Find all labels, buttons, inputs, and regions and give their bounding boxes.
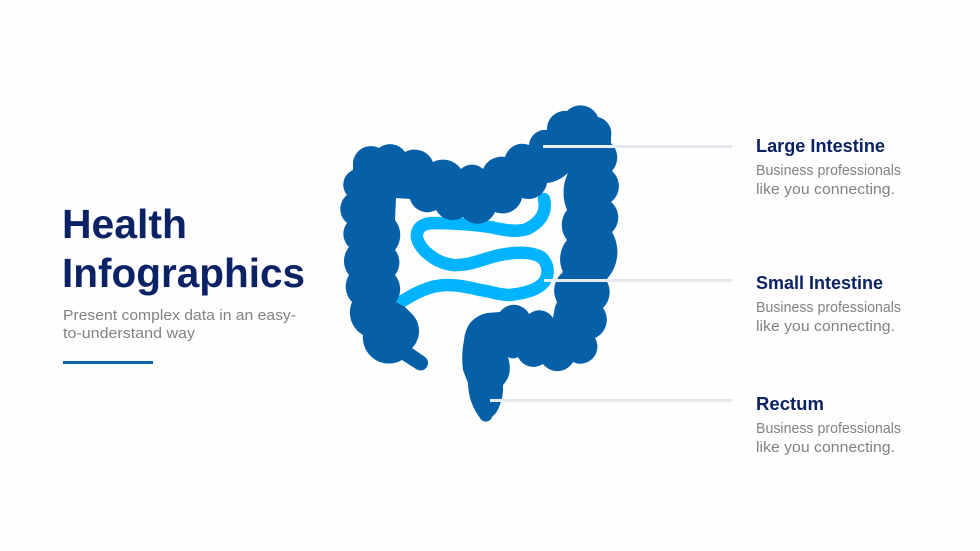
- subtitle text: [63, 307, 296, 342]
- label: large intestine: like you connecting.: [756, 181, 895, 198]
- label: large intestine: Business professionals: [756, 162, 901, 179]
- leader line: large intestine: [543, 145, 732, 148]
- label: small intestine: Business professionals: [756, 299, 901, 316]
- accent rule: [63, 361, 153, 364]
- label: small intestine: Small Intestine: [756, 273, 883, 293]
- leader line: rectum: [490, 399, 732, 402]
- label: small intestine: like you connecting.: [756, 318, 895, 335]
- label: rectum: Rectum: [756, 394, 824, 414]
- label: small intestine: [756, 273, 901, 335]
- title: [62, 201, 305, 296]
- label: rectum: [756, 394, 901, 456]
- large intestine: [340, 105, 619, 422]
- small intestine: [395, 199, 548, 306]
- label: rectum: Business professionals: [756, 420, 901, 437]
- title: Infographics: [62, 250, 305, 296]
- label: large intestine: Large Intestine: [756, 136, 885, 156]
- subtitle text: to-understand way: [63, 325, 196, 342]
- icon: intestines: [340, 105, 619, 422]
- leader line: small intestine: [544, 279, 732, 282]
- title: Health: [62, 201, 187, 247]
- label: large intestine: [756, 136, 901, 198]
- subtitle text: Present complex data in an easy-: [63, 307, 296, 324]
- label: rectum: like you connecting.: [756, 439, 895, 456]
